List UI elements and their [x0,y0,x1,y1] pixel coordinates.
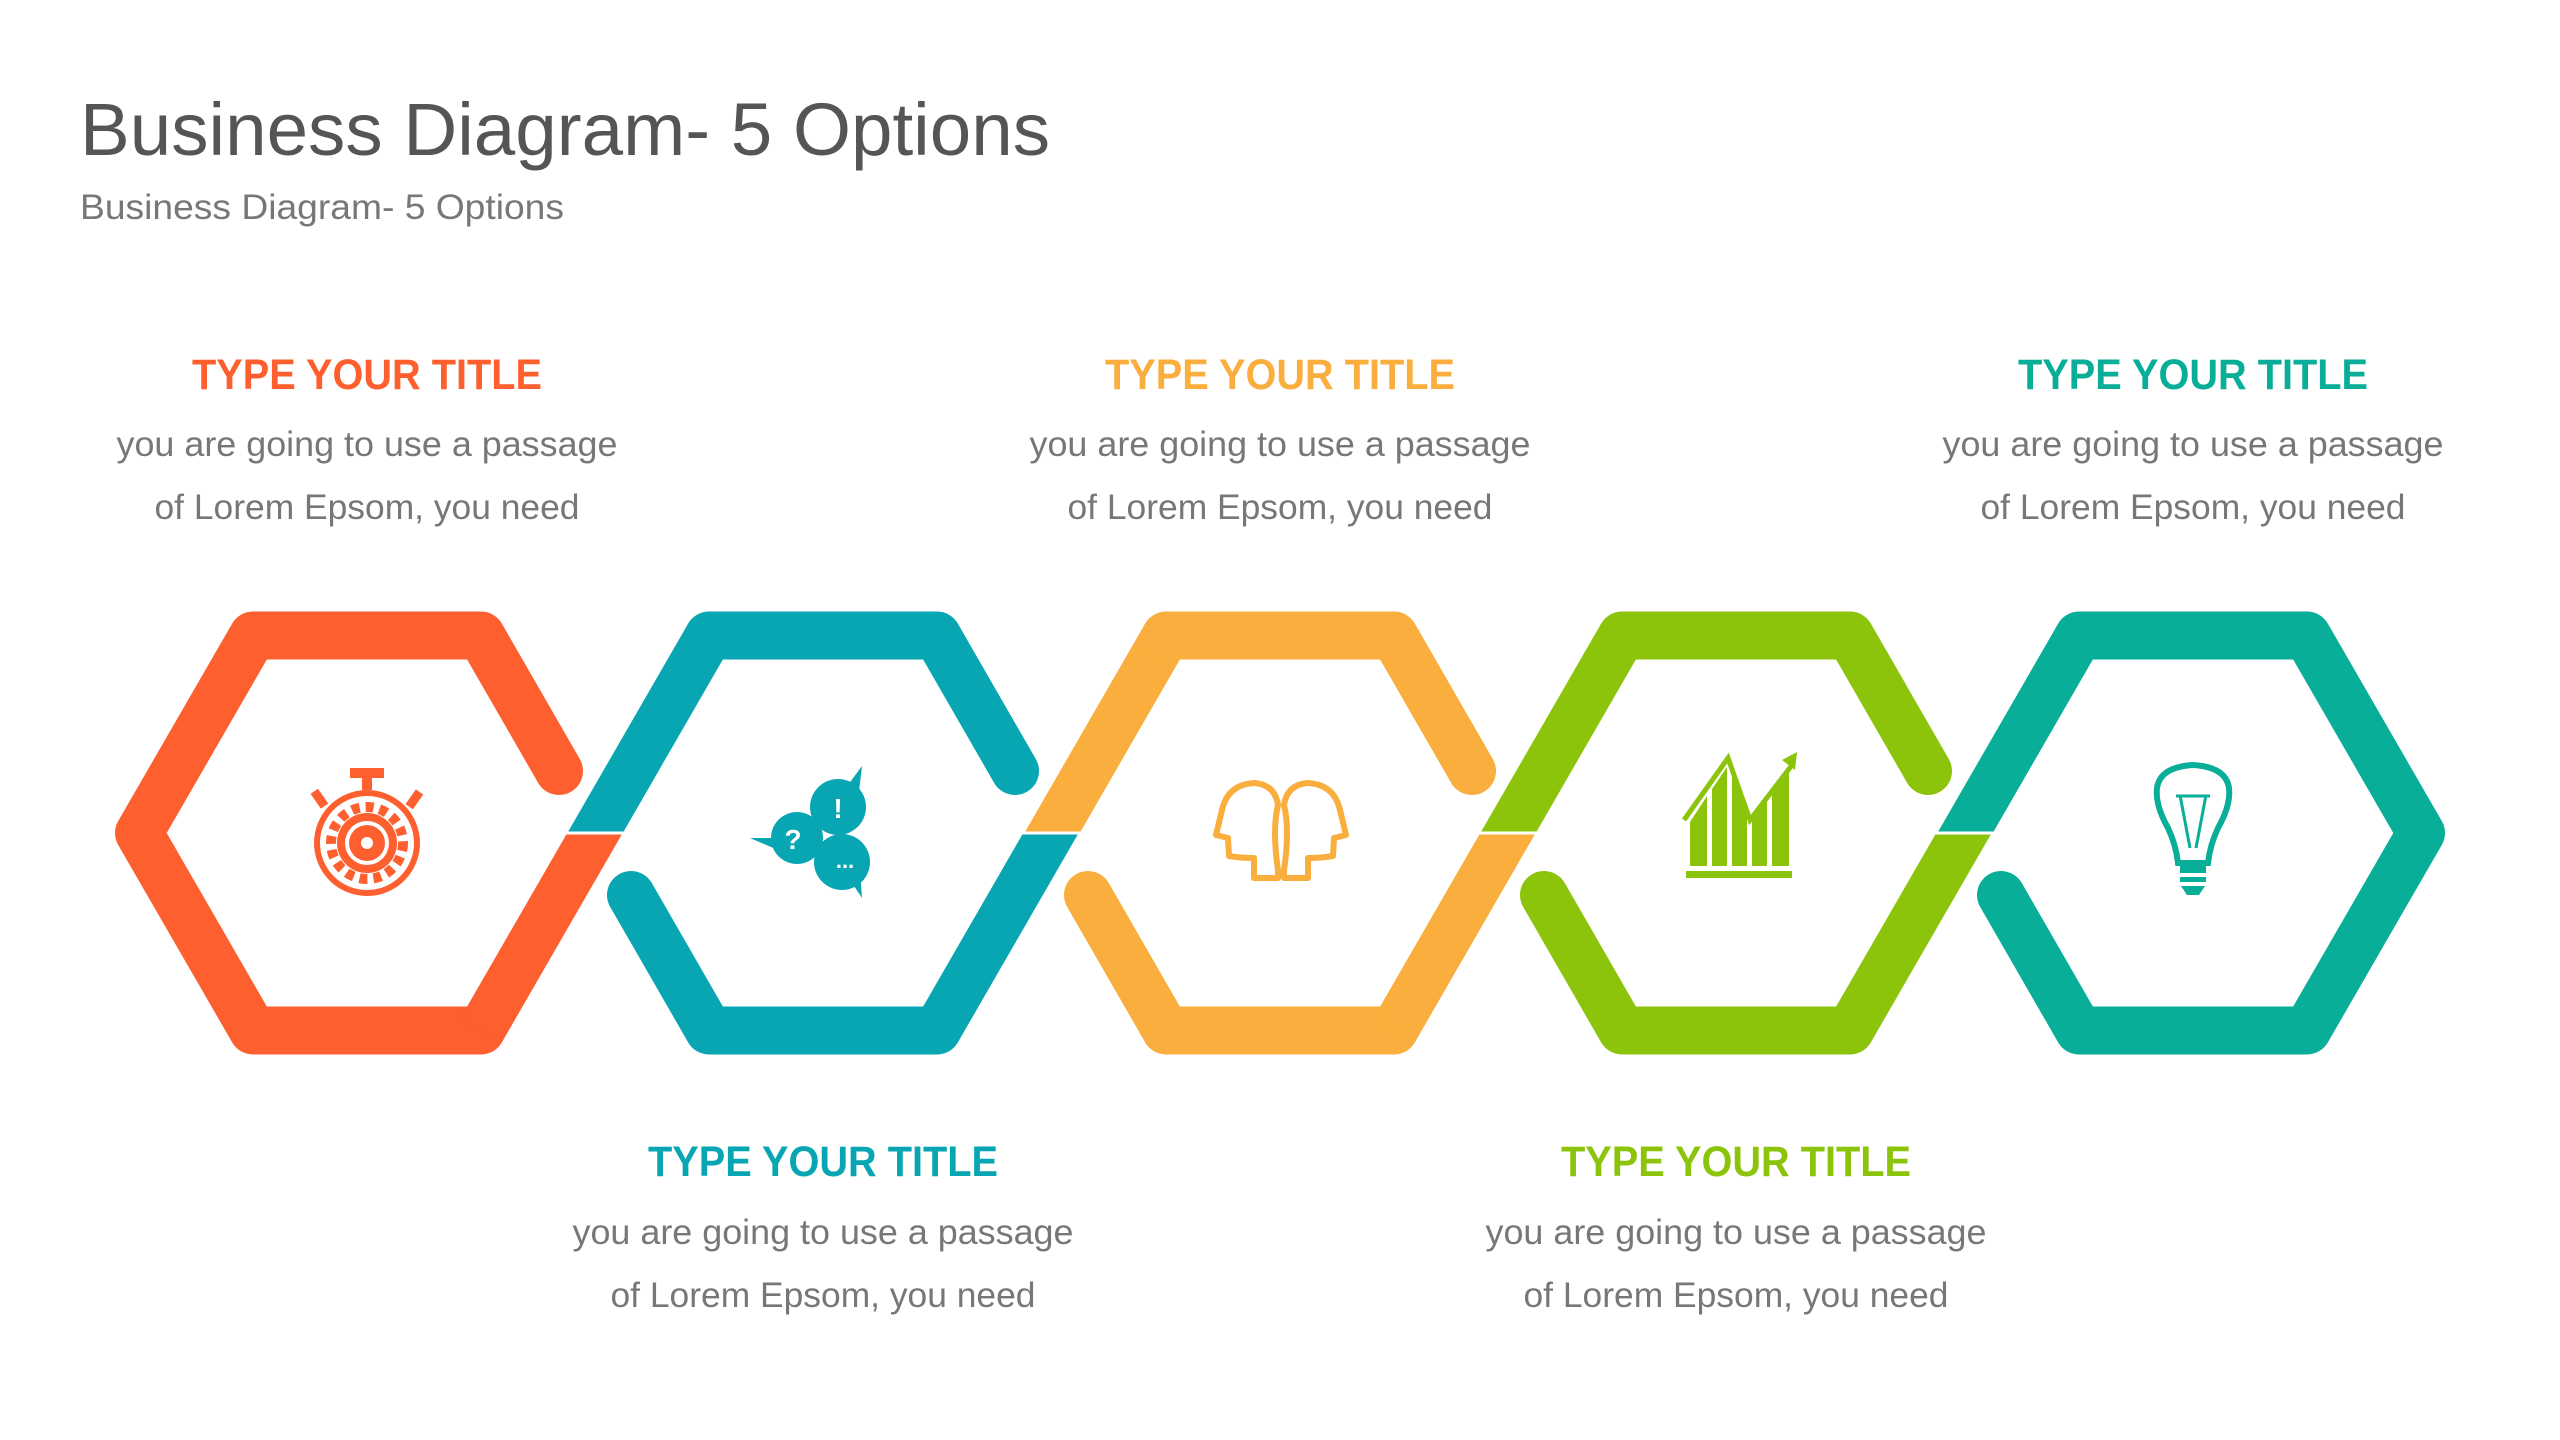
text block: option 2: you are going to use a passage [572,1213,1074,1252]
icon: speech bubbles [750,766,870,898]
hexagon chain [139,636,2421,1030]
hexagon: yellow [1029,636,1531,1030]
icon: stopwatch gear [311,768,423,893]
hexagon: dark teal [1942,636,2421,1030]
text block: option 2: of Lorem Epsom, you need [610,1276,1036,1315]
subtitle: Business Diagram- 5 Options [80,188,564,227]
text block: option 2: TYPE YOUR TITLE [648,1138,998,1186]
title: Business Diagram- 5 Options [80,88,1050,171]
text block: option 3: TYPE YOUR TITLE [1105,351,1455,399]
text block: option 4 [1486,1138,1986,1315]
hexagon: teal [572,636,1074,1030]
text block: option 1: of Lorem Epsom, you need [154,488,580,527]
text block: option 4: of Lorem Epsom, you need [1524,1276,1948,1315]
text block: option 5: you are going to use a passage [1942,425,2444,464]
icon: speech bubbles: ! [833,793,843,824]
text block: option 3: of Lorem Epsom, you need [1068,488,1492,527]
text block: option 4: you are going to use a passage [1486,1213,1986,1252]
text block: option 3 [1030,351,1530,527]
icon: light bulb [2157,765,2229,895]
text block: option 4: TYPE YOUR TITLE [1561,1138,1911,1186]
text block: option 5: of Lorem Epsom, you need [1980,488,2406,527]
text block: option 1: you are going to use a passage [116,425,618,464]
icon: speech bubbles: ... [836,848,854,873]
icon: growth chart [1684,752,1797,878]
icon: two heads [1216,783,1346,878]
text block: option 2 [572,1138,1074,1315]
hexagon: orange [139,636,618,1030]
text block: option 1 [116,351,618,527]
icon: speech bubbles: ? [784,824,802,855]
hexagon: green [1485,636,1987,1030]
text block: option 5: TYPE YOUR TITLE [2018,351,2368,399]
text block: option 3: you are going to use a passage [1030,425,1530,464]
text block: option 1: TYPE YOUR TITLE [192,351,542,399]
text block: option 5 [1942,351,2444,527]
